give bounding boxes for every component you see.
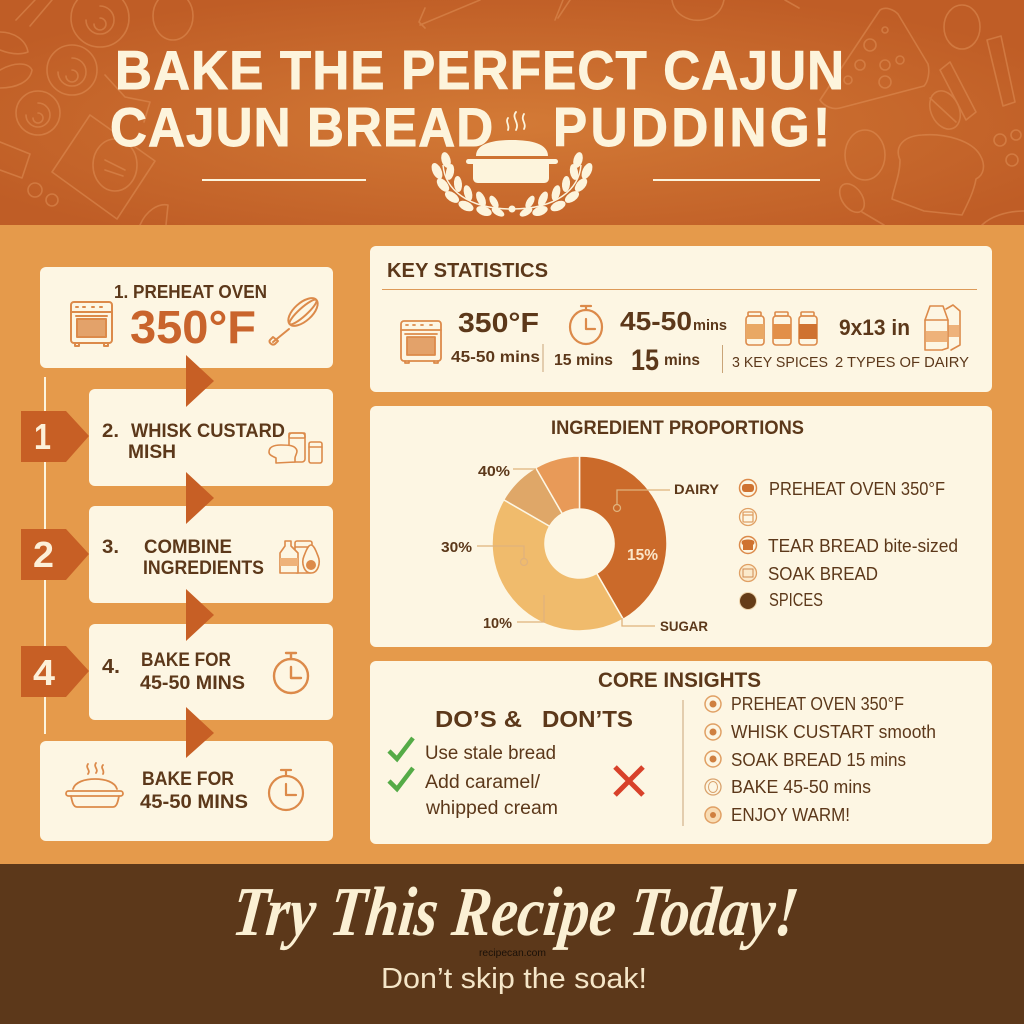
icon: spice jars (746, 312, 817, 345)
stat: 45-50 mins: mins (693, 317, 727, 334)
step card 4: bake for 45-50 mins: 4. (102, 656, 120, 678)
stat: 45-50 mins (620, 306, 727, 336)
insight: bake: BAKE 45-50 mins (731, 777, 871, 797)
arrow: step 1 to 2 (186, 355, 214, 407)
icon: stopwatch (274, 653, 308, 693)
icon: bread and jars (269, 433, 322, 463)
step card 2: whisk custard: MISH (128, 442, 176, 463)
tagline: Don’t skip the soak! (381, 963, 647, 995)
step card 4: bake for 45-50 mins (89, 624, 333, 720)
step card 2: whisk custard: WHISK CUSTARD (131, 421, 285, 442)
icon: steaming pot with wreath (429, 112, 595, 219)
badge 4 (21, 646, 89, 697)
icon: baking dish (66, 763, 123, 807)
title: CAJUN BREAD (110, 97, 493, 158)
do: add caramel (425, 772, 558, 819)
legend item: blank icon (740, 508, 756, 526)
insight: preheat oven: PREHEAT OVEN 350°F (731, 694, 904, 714)
chart labels: SUGAR (660, 618, 708, 634)
icon: stopwatch (570, 306, 602, 344)
icon: milk cartons (925, 305, 960, 350)
stat: 15 mins: 15 mins (554, 352, 613, 369)
chart labels: 10% (483, 615, 512, 632)
chart labels: 15% (627, 547, 658, 564)
stat: 350F: 45-50 mins (451, 349, 540, 366)
title: PUDDING! (553, 97, 830, 158)
arrow: step 3 to 4 (186, 589, 214, 641)
title rule left (202, 179, 366, 181)
insight: enjoy warm: ENJOY WARM! (731, 805, 850, 825)
step card 5: bake for 45-50 mins (40, 741, 333, 841)
chart leader lines (477, 469, 670, 626)
stat labels (732, 354, 969, 371)
stat labels: 3 KEY SPICES (732, 354, 828, 371)
badge 2 (21, 529, 89, 580)
legend item: preheat oven: PREHEAT OVEN 350°F (769, 479, 945, 499)
legend item: tear bread: TEAR BREAD bite-sized (768, 536, 958, 556)
step card 5: bake for 45-50 mins: 45-50 MINS (140, 792, 248, 813)
step card 4: bake for 45-50 mins: BAKE FOR (141, 650, 231, 671)
heading: core insights: CORE INSIGHTS (598, 669, 761, 692)
insight: whisk custart: WHISK CUSTART smooth (731, 722, 936, 742)
step card 4: bake for 45-50 mins: 45-50 MINS (140, 673, 245, 694)
legend item: soak bread: SOAK BREAD (768, 564, 878, 584)
step card 1: preheat oven: 350°F (130, 301, 256, 353)
icon: oven (401, 321, 441, 363)
stat: 15 mins (554, 344, 700, 377)
timeline line (44, 377, 46, 734)
title rule right (653, 179, 820, 181)
title: BAKE THE PERFECT CAJUN (115, 40, 844, 101)
heading: ingredient proportions: INGREDIENT PROPORTIONS (551, 418, 804, 439)
footer band (0, 864, 1024, 1024)
step card 3: combine ingredients: 3. (102, 537, 119, 558)
heading: key statistics: KEY STATISTICS (387, 260, 548, 282)
heading: do's and don'ts: DON’TS (542, 706, 633, 732)
step card 3: combine ingredients: COMBINE (144, 537, 232, 558)
step card 1: preheat oven: 1. PREHEAT OVEN (114, 282, 267, 302)
step card 2: whisk custard: 2. (102, 421, 119, 442)
icon: stopwatch (269, 770, 303, 810)
step card 3: combine ingredients: INGREDIENTS (143, 558, 264, 579)
icon: bottles and avocado (280, 541, 319, 573)
insight: soak bread: SOAK BREAD 15 mins (731, 750, 906, 770)
header banner (0, 0, 1024, 225)
step card 5: bake for 45-50 mins: BAKE FOR (142, 769, 234, 790)
panel: ingredient proportions (370, 406, 992, 647)
call to action: Try This Recipe Today! (229, 873, 802, 951)
chart labels: 30% (441, 539, 472, 556)
chart labels: DAIRY (674, 481, 720, 497)
arrow: step 4 to 5 (186, 707, 214, 758)
stat: pan size: 9x13 in (839, 315, 910, 340)
step card 3: combine ingredients (89, 506, 333, 603)
donut chart (492, 456, 667, 631)
icon: check 2 (389, 768, 413, 789)
heading: do's and don'ts (435, 706, 633, 732)
title (110, 40, 844, 158)
stat: 350F: 350°F (458, 307, 539, 338)
legend (740, 479, 958, 610)
stat labels: 2 TYPES OF DAIRY (835, 354, 969, 371)
arrow: step 2 to 3 (186, 472, 214, 524)
panel: core insights (370, 661, 992, 844)
background baking doodles (0, 0, 1024, 225)
badge 4: 4 (33, 652, 55, 693)
icon: whisk (269, 293, 322, 345)
chart labels (441, 463, 720, 634)
stat: 350F (451, 307, 540, 366)
step card 2: whisk custard (89, 389, 333, 486)
icon: red cross (615, 767, 643, 795)
icon: oven (71, 302, 112, 346)
badge 2: 2 (33, 534, 54, 575)
legend item: spices (740, 590, 823, 610)
do: use stale bread: Use stale bread (425, 743, 556, 764)
icon: check 1 (389, 738, 413, 759)
watermark: recipecan.com (479, 947, 546, 959)
panel: key statistics (370, 246, 992, 392)
badge 1: 1 (34, 416, 51, 457)
legend item: spices: SPICES (769, 590, 823, 610)
badge 1 (21, 411, 89, 462)
do: add caramel: whipped cream (425, 798, 558, 819)
step card 1: preheat oven (40, 267, 333, 368)
stat: 15 mins: 15 (631, 344, 659, 377)
insights list (705, 694, 936, 825)
stat: 45-50 mins: 45-50 (620, 306, 692, 336)
heading: do's and don'ts: DO’S & (435, 706, 522, 732)
chart labels: 40% (478, 463, 510, 480)
do: add caramel: Add caramel/ (425, 772, 541, 793)
stat: 15 mins: mins (664, 352, 700, 369)
